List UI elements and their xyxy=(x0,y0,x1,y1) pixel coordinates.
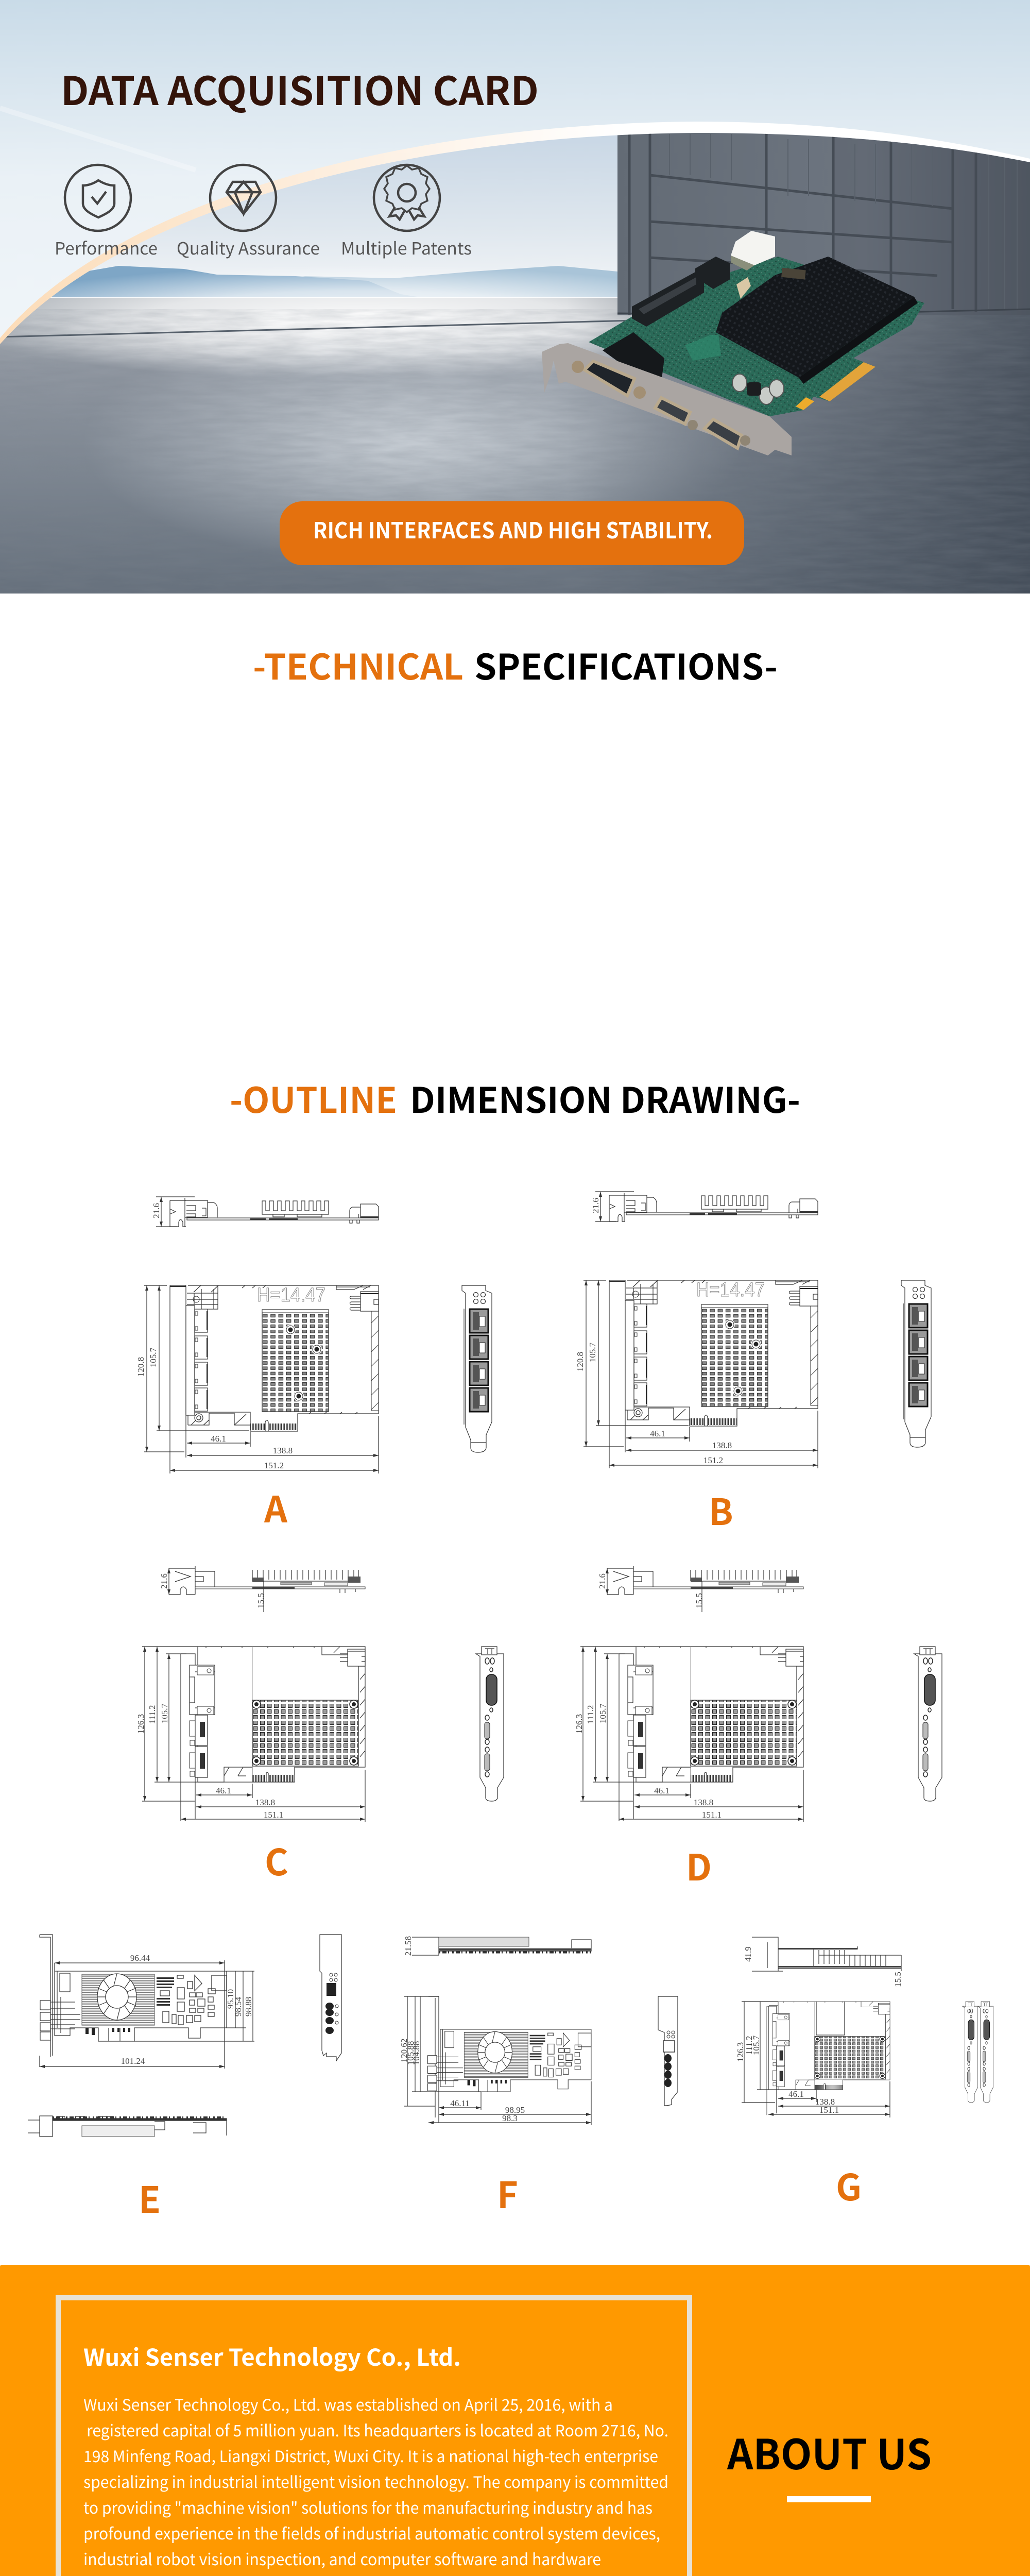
drawing B xyxy=(575,1192,931,1468)
drawing F: 46.11 xyxy=(450,2098,470,2108)
heading: about us: ABOUT US xyxy=(727,2422,932,2482)
drawing G: 41.9 xyxy=(743,1946,753,1962)
drawing G: 46.1 xyxy=(788,2089,804,2099)
drawing B: H=14.47 xyxy=(696,1279,765,1301)
icon: patents rosette xyxy=(374,165,440,231)
icon labels: Performance xyxy=(55,235,158,260)
drawing E xyxy=(28,1935,341,2137)
drawing G: 126.3 xyxy=(735,2042,745,2062)
heading: technical specifications xyxy=(253,639,778,690)
drawing G xyxy=(735,1937,993,2117)
drawing F: 105.88 xyxy=(406,2041,416,2065)
title: DATA ACQUISITION CARD xyxy=(61,60,539,116)
heading: outline dimension drawing: DIMENSION DRAWING- xyxy=(410,1072,800,1123)
drawing F: 98.3 xyxy=(502,2113,518,2123)
drawing D: 151.1 xyxy=(702,1810,722,1820)
drawing B: 138.8 xyxy=(712,1440,732,1450)
drawing E: 96.44 xyxy=(130,1953,150,1963)
icon labels xyxy=(55,235,472,260)
drawing C: 111.2 xyxy=(147,1705,157,1724)
company introduction text: Wuxi Senser Technology Co., Ltd. was established on April 25, 2016, with a xyxy=(83,2392,613,2415)
drawing B: 105.7 xyxy=(588,1342,597,1362)
label F: F xyxy=(497,2167,518,2219)
icon: performance shield xyxy=(65,165,131,231)
label B: B xyxy=(709,1484,733,1536)
drawing A: 46.1 xyxy=(211,1434,226,1444)
drawing C xyxy=(136,1566,504,1822)
drawing E: 101.24 xyxy=(121,2056,145,2066)
drawing G: 138.8 xyxy=(815,2097,835,2107)
drawing D: 138.8 xyxy=(694,1798,713,1807)
drawing G: 111.2 xyxy=(744,2036,754,2055)
heading: outline dimension drawing xyxy=(230,1072,800,1123)
company introduction text: 198 Minfeng Road, Liangxi District, Wuxi City. It is a national high-tech enterprise xyxy=(83,2444,658,2467)
drawing F: 98.95 xyxy=(505,2105,525,2115)
icon labels: Multiple Patents xyxy=(341,235,472,260)
heading: technical specifications: SPECIFICATIONS- xyxy=(474,639,778,690)
drawing A: H=14.47 xyxy=(257,1284,325,1306)
drawing B: 120.8 xyxy=(575,1352,585,1371)
drawing B: 151.2 xyxy=(703,1455,723,1465)
drawing A: 151.2 xyxy=(264,1461,284,1470)
drawing B: 46.1 xyxy=(650,1429,665,1438)
hero banner xyxy=(0,0,1030,594)
drawing C: 138.8 xyxy=(255,1798,275,1807)
company name: Wuxi Senser Technology Co., Ltd. xyxy=(83,2339,461,2372)
drawing F: 120.62 xyxy=(399,2039,409,2062)
product photo: acquisition card xyxy=(542,231,924,455)
white frame xyxy=(58,2298,690,2576)
label A: A xyxy=(264,1481,288,1533)
drawing D: 111.2 xyxy=(586,1705,595,1724)
company introduction text: registered capital of 5 million yuan. Its headquarters is located at Room 2716, No. xyxy=(87,2418,668,2441)
company introduction text: industrial robot vision inspection, and computer software and hardware xyxy=(83,2547,601,2570)
heading: technical specifications: -TECHNICAL xyxy=(253,639,464,690)
drawing F: 21.58 xyxy=(403,1936,413,1956)
drawing G: 105.7 xyxy=(751,2035,761,2055)
drawing E: 98.88 xyxy=(244,1997,253,2016)
drawing G: 15.5 xyxy=(893,1972,903,1987)
drawing A: 105.7 xyxy=(148,1347,158,1367)
hero scene xyxy=(0,124,1030,594)
drawing E: 98.54 xyxy=(233,1996,243,2016)
drawing C: 105.7 xyxy=(160,1703,169,1723)
icon: quality diamond xyxy=(210,165,276,231)
drawing C: 126.3 xyxy=(136,1714,146,1734)
callout button: RICH INTERFACES AND HIGH STABILITY. xyxy=(313,513,713,545)
drawing A xyxy=(136,1197,492,1473)
heading: outline dimension drawing: -OUTLINE xyxy=(230,1072,397,1123)
icon labels: Quality Assurance xyxy=(177,235,320,260)
drawing A: 21.6 xyxy=(151,1203,161,1218)
drawing D: 126.3 xyxy=(574,1714,584,1734)
drawing D: 105.7 xyxy=(598,1703,608,1723)
drawing A: 138.8 xyxy=(273,1446,293,1455)
drawing A: 120.8 xyxy=(136,1357,146,1377)
label G: G xyxy=(836,2159,862,2211)
drawing G: 151.1 xyxy=(819,2105,839,2115)
drawing C: 46.1 xyxy=(216,1786,231,1795)
drawing B: 21.6 xyxy=(591,1198,600,1213)
callout button xyxy=(280,501,744,565)
company introduction text: specializing in industrial intelligent vision technology. The company is committed xyxy=(83,2469,668,2493)
label D: D xyxy=(686,1839,712,1891)
panel: about us xyxy=(0,2265,1030,2576)
drawing D: 21.6 xyxy=(597,1573,607,1589)
drawing E: 95.10 xyxy=(226,1989,235,2009)
company introduction text: to providing "machine vision" solutions for the manufacturing industry and has xyxy=(83,2495,653,2518)
label C: C xyxy=(265,1834,288,1886)
company introduction text: profound experience in the fields of industrial automatic control system devices, xyxy=(83,2521,660,2544)
company introduction text xyxy=(83,2392,668,2576)
drawing F: 104.88 xyxy=(411,2041,421,2065)
drawing C: 21.6 xyxy=(159,1573,169,1589)
label E: E xyxy=(139,2172,161,2224)
drawing C: 15.5 xyxy=(256,1593,266,1608)
drawing D: 15.5 xyxy=(694,1593,704,1608)
drawing C: 151.1 xyxy=(264,1810,283,1820)
drawing F xyxy=(399,1936,678,2125)
drawing D: 46.1 xyxy=(654,1786,670,1795)
hero curved band xyxy=(0,122,1030,594)
drawing D xyxy=(574,1566,942,1822)
